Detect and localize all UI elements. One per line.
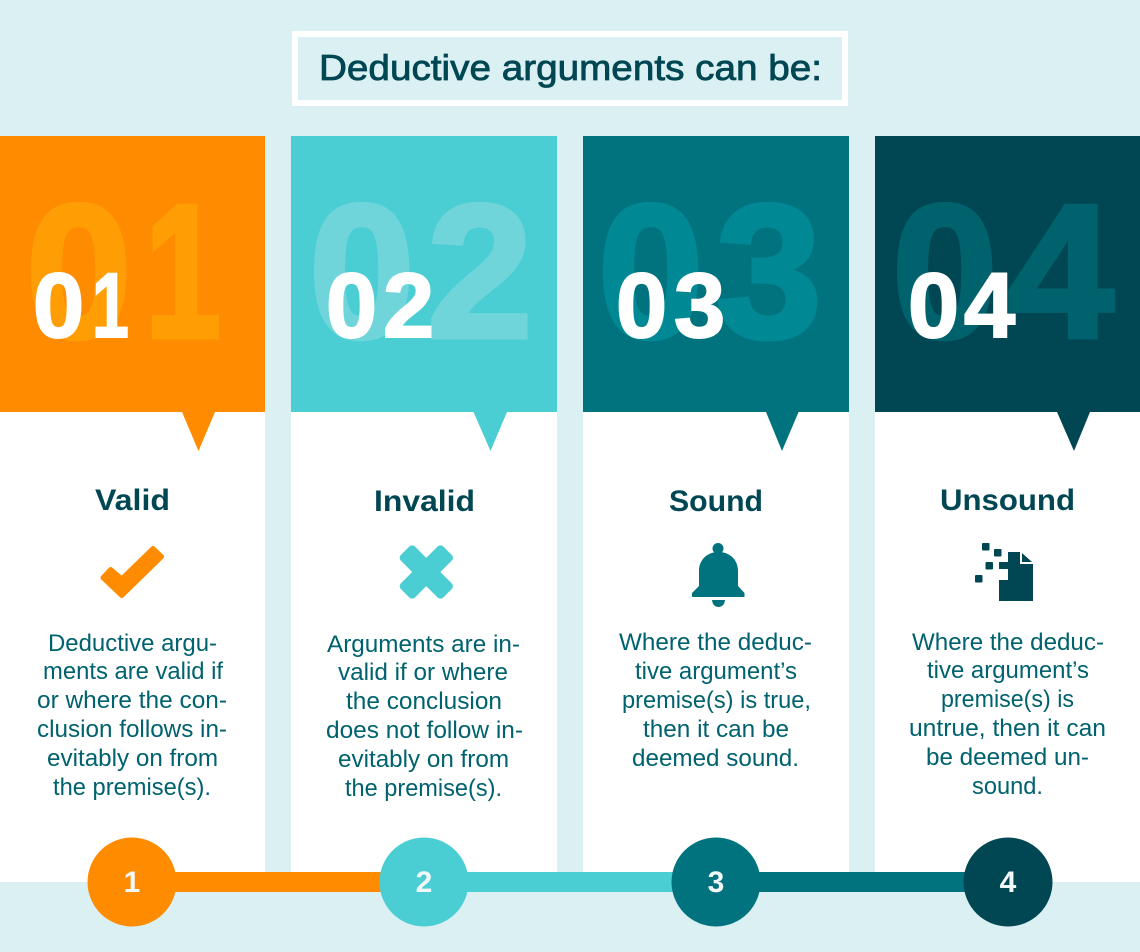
text block: unsound description: tive argument’s (927, 657, 1089, 684)
text block: sound description (619, 629, 812, 772)
heading: Valid: Valid (95, 484, 170, 517)
icon: check mark (103, 548, 162, 596)
text block: invalid description: Arguments are in- (327, 631, 520, 658)
icon: bell (692, 543, 744, 607)
text block: sound description: then it can be (643, 716, 789, 743)
step 1 (88, 838, 176, 926)
text block: sound description: deemed sound. (632, 745, 799, 772)
title: Deductive arguments can be: (319, 47, 822, 88)
text block: unsound description: Where the deduc- (912, 629, 1104, 656)
heading: Unsound: Unsound (940, 484, 1075, 517)
heading: Invalid: Invalid (374, 485, 475, 518)
text block: invalid description: evitably on from (338, 746, 509, 773)
title (295, 34, 845, 103)
header block 01: 1 (92, 253, 129, 357)
text block: invalid description: does not follow in- (326, 717, 523, 744)
header block 03: 03 (616, 255, 725, 357)
text block: sound description: Where the deduc- (619, 629, 812, 656)
text block: valid description: ments are valid if (43, 658, 223, 685)
header block 02: 02 (326, 255, 434, 357)
step 4: 4 (1000, 866, 1017, 899)
icon: cross (398, 544, 455, 600)
step 3: 3 (708, 866, 724, 899)
text block: invalid description (326, 631, 523, 802)
panel: unsound (875, 136, 1140, 882)
header block 02: 02 (309, 166, 533, 378)
icon: disintegrating file (975, 543, 1033, 601)
header block 01: 1 (145, 166, 221, 378)
header block 04: 04 (908, 255, 1015, 357)
text block: unsound description: be deemed un- (926, 744, 1089, 771)
text block: valid description (37, 630, 227, 801)
header block 04: 04 (892, 166, 1114, 378)
text block: invalid description: the conclusion (346, 688, 502, 715)
text block: valid description: clusion follows in- (37, 716, 227, 743)
step 2 (380, 838, 468, 926)
header block 03: 03 (598, 166, 822, 378)
step 3 (672, 838, 760, 926)
text block: invalid description: valid if or where (338, 659, 508, 686)
panel: valid (0, 136, 265, 882)
text block: unsound description: untrue, then it can (909, 715, 1106, 742)
panel: invalid (291, 136, 557, 882)
text block: invalid description: the premise(s). (345, 775, 502, 802)
text block: unsound description: premise(s) is (941, 686, 1074, 713)
header block 01: 0 (33, 255, 84, 357)
text block: sound description: premise(s) is true, (622, 687, 811, 714)
panel: sound (583, 136, 849, 882)
step 1: 1 (124, 866, 140, 899)
text block: valid description: evitably on from (47, 745, 218, 772)
header block 04 (875, 136, 1140, 451)
text block: valid description: the premise(s). (53, 774, 211, 801)
header block 01 (0, 136, 265, 451)
heading: Sound: Sound (669, 485, 763, 518)
text block: valid description: Deductive argu- (48, 630, 217, 657)
text block: unsound description (909, 629, 1106, 800)
step 4 (964, 838, 1052, 926)
step 2: 2 (416, 866, 432, 899)
header block 02 (291, 136, 557, 451)
timeline connector and steps (88, 838, 1052, 926)
header block 01: 0 (26, 166, 132, 378)
text block: valid description: or where the con- (37, 687, 227, 714)
text block: unsound description: sound. (972, 773, 1043, 800)
text block: sound description: tive argument’s (635, 658, 797, 685)
header block 03 (583, 136, 849, 451)
